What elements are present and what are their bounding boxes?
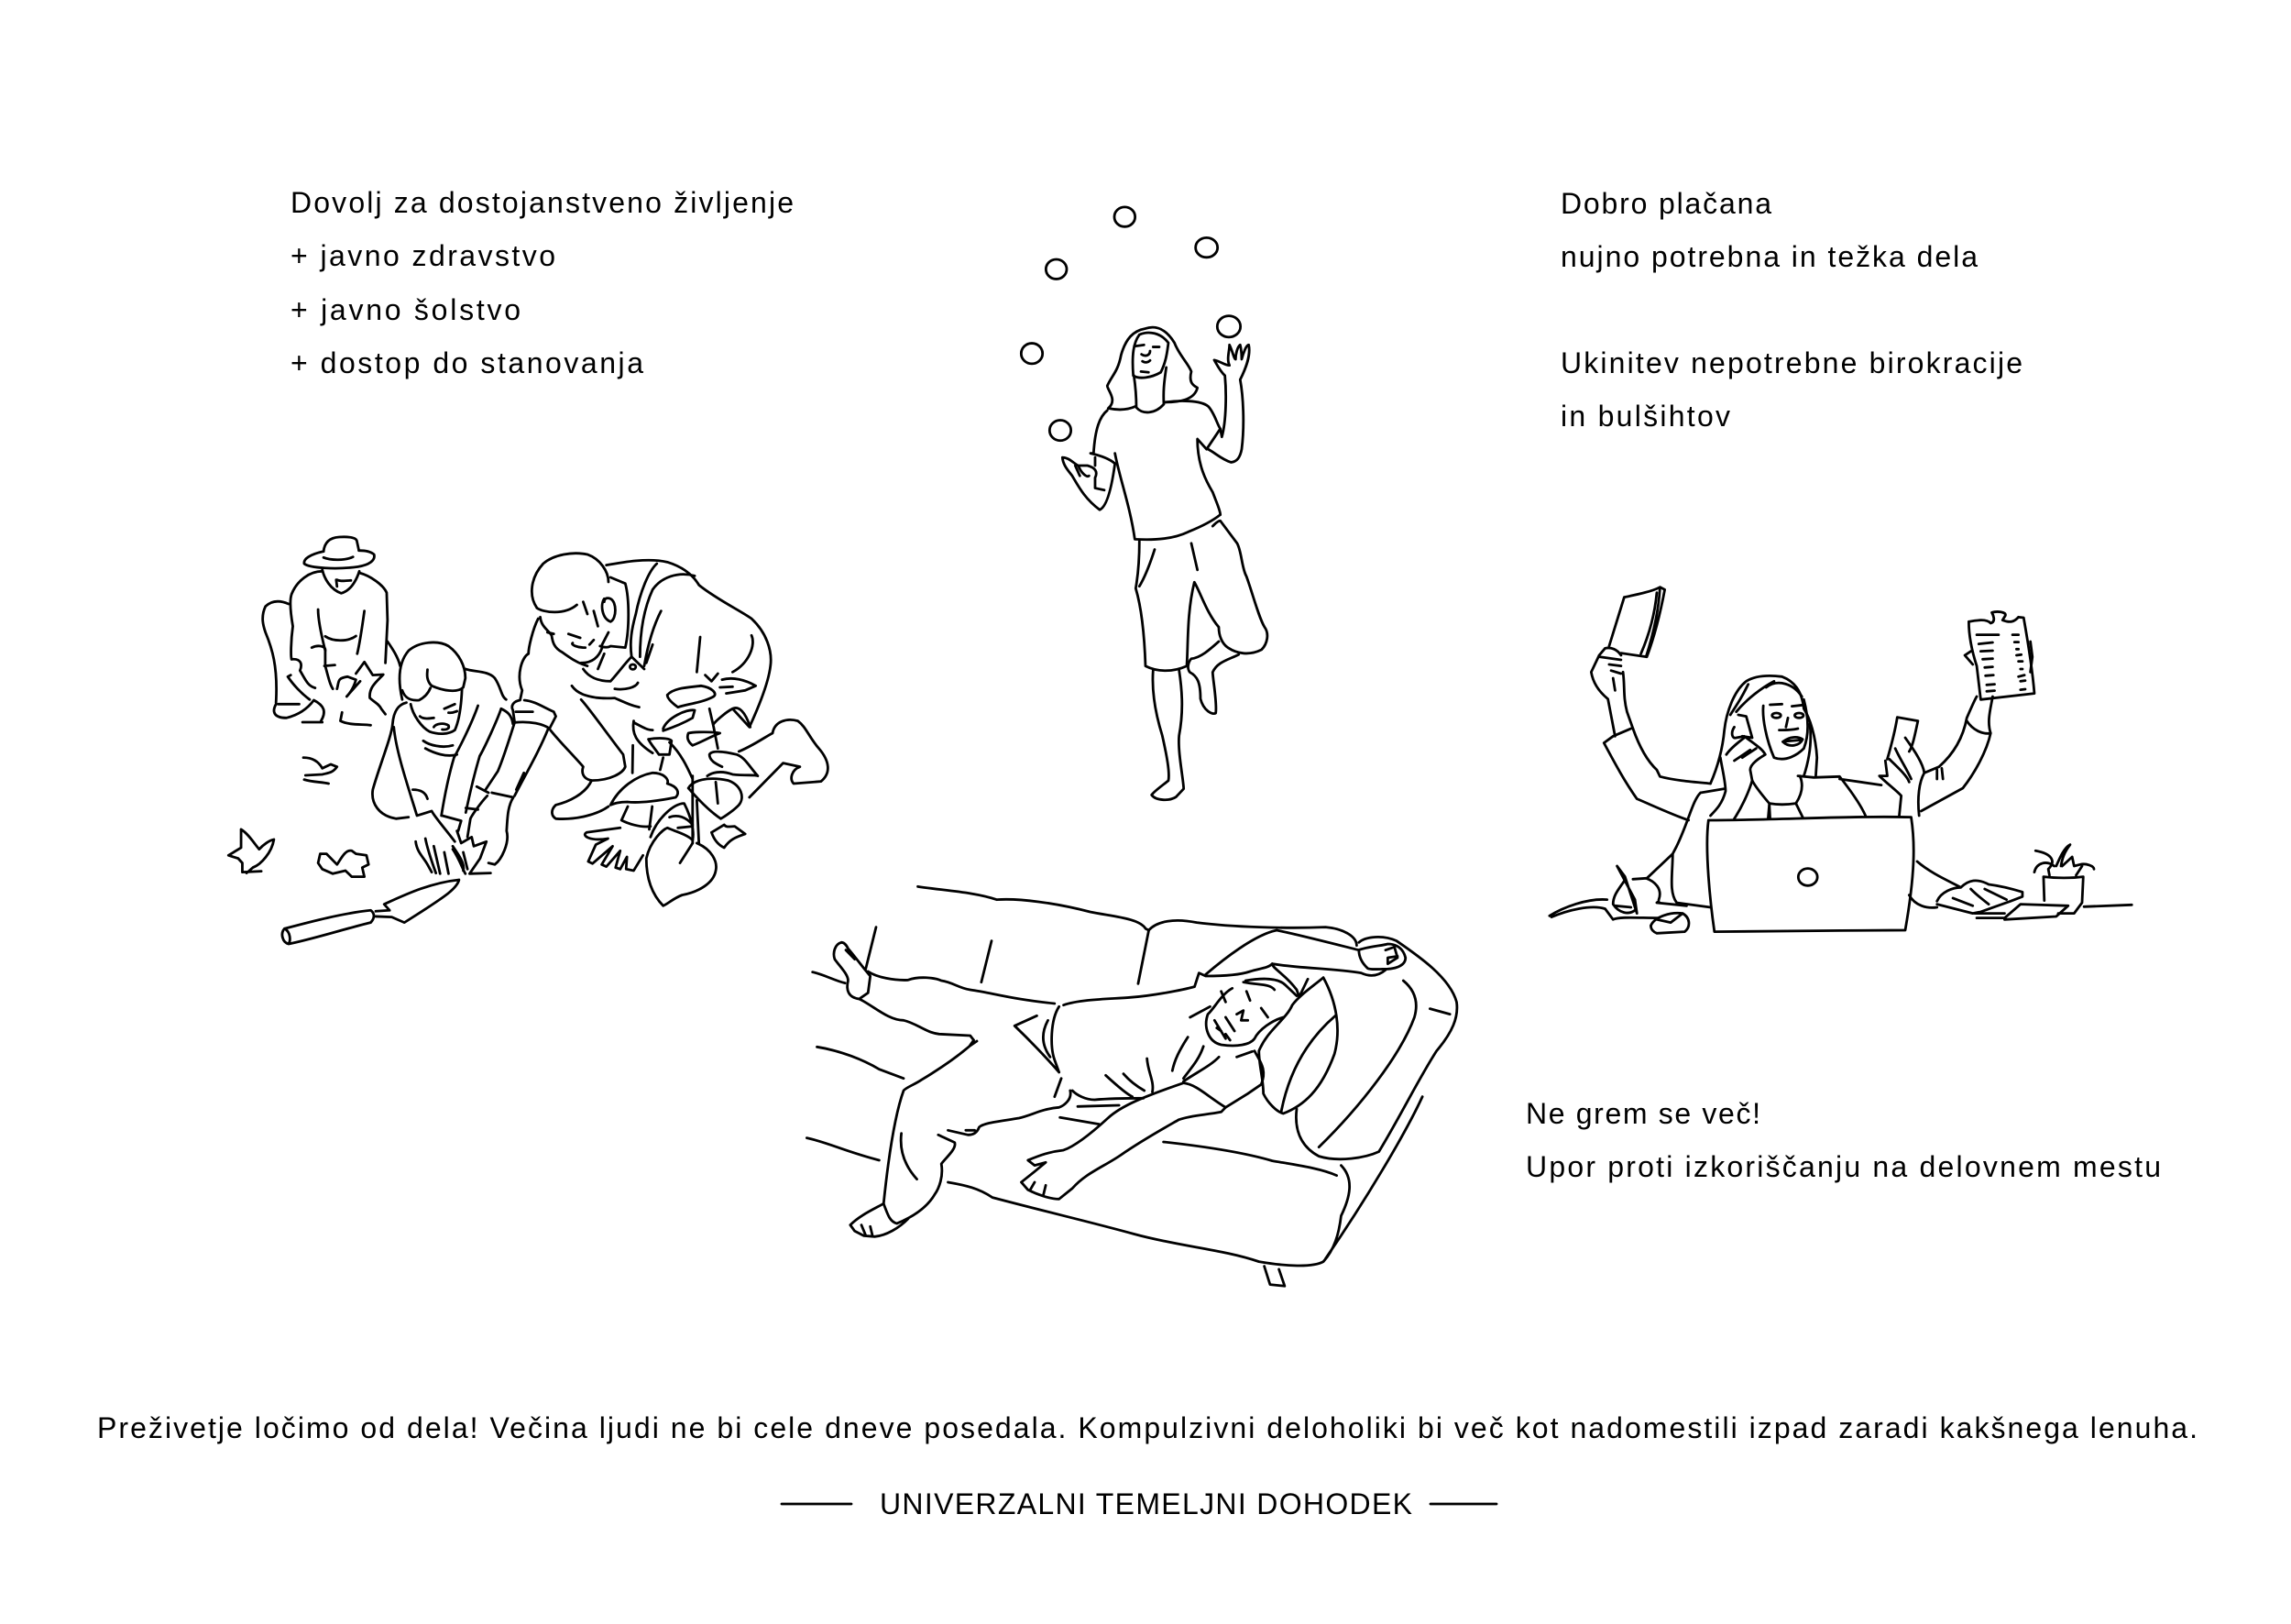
laptop — [1707, 817, 1913, 932]
illustration: gardeners — [228, 537, 828, 944]
text block: workplace resistance: Ne grem se več! — [1526, 1097, 1760, 1130]
torso and raised arm — [1060, 930, 1406, 1125]
shorts and legs — [1135, 521, 1267, 800]
phone at ear — [1710, 715, 1770, 818]
ground leaves — [228, 758, 368, 877]
text block: dignified life: + dostop do stanovanja — [290, 346, 643, 379]
illustration: man resting on sofa — [806, 886, 1457, 1286]
text block: dignified life: Dovolj za dostojanstveno življenje — [290, 186, 794, 219]
computer mouse — [1650, 913, 1689, 933]
potted plant — [2034, 845, 2132, 914]
text block: workplace resistance — [1526, 1097, 2161, 1183]
person: man in hat — [263, 537, 400, 725]
illustration: multitasking woman — [1550, 587, 2132, 933]
head and hair — [1107, 327, 1198, 412]
calculator hand — [1909, 861, 2068, 919]
sleeping head — [1190, 979, 1297, 1107]
head and hair — [1710, 675, 1817, 784]
text block: well-paid work: Dobro plačana — [1561, 187, 1771, 220]
sofa — [806, 886, 1457, 1286]
juggling balls — [1021, 207, 1241, 441]
book in raised hand — [1591, 587, 1710, 820]
icon: trowel — [282, 880, 459, 944]
t-shirt and arms — [1062, 345, 1249, 540]
footer title: universal basic income: UNIVERZALNI TEMELJNI DOHODEK — [880, 1487, 1412, 1520]
text block: well-paid work: Ukinitev nepotrebne birokracije — [1561, 346, 2022, 379]
person: child — [372, 642, 513, 873]
neck and jacket — [1768, 776, 1881, 818]
lowered arm and hand — [1021, 1083, 1225, 1199]
closing statement: Preživetje ločimo od dela! Večina ljudi ne bi cele dneve posedala. Kompulzivni deloholiki bi več kot nadomestili izpad zaradi kakšnega lenuha. — [97, 1411, 2198, 1444]
text block: workplace resistance: Upor proti izkoriščanju na delovnem mestu — [1526, 1150, 2161, 1183]
text block: dignified life — [290, 186, 794, 379]
legs and trousers — [834, 942, 1070, 1236]
plant: large leaves — [610, 674, 758, 905]
text block: well-paid work: in bulšihtov — [1561, 400, 1730, 433]
text block: well-paid work: nujno potrebna in težka dela — [1561, 240, 1978, 273]
pillow — [1259, 978, 1338, 1114]
illustration: juggler — [1021, 207, 1267, 800]
clipboard — [1965, 611, 2034, 699]
text block: well-paid work — [1561, 187, 2022, 433]
phone in hand — [1880, 697, 1992, 816]
text block: dignified life: + javno zdravstvo — [290, 239, 555, 272]
person: bearded man in overalls — [486, 554, 828, 871]
writing arm and notebook — [1550, 789, 1725, 919]
text block: dignified life: + javno šolstvo — [290, 293, 521, 326]
